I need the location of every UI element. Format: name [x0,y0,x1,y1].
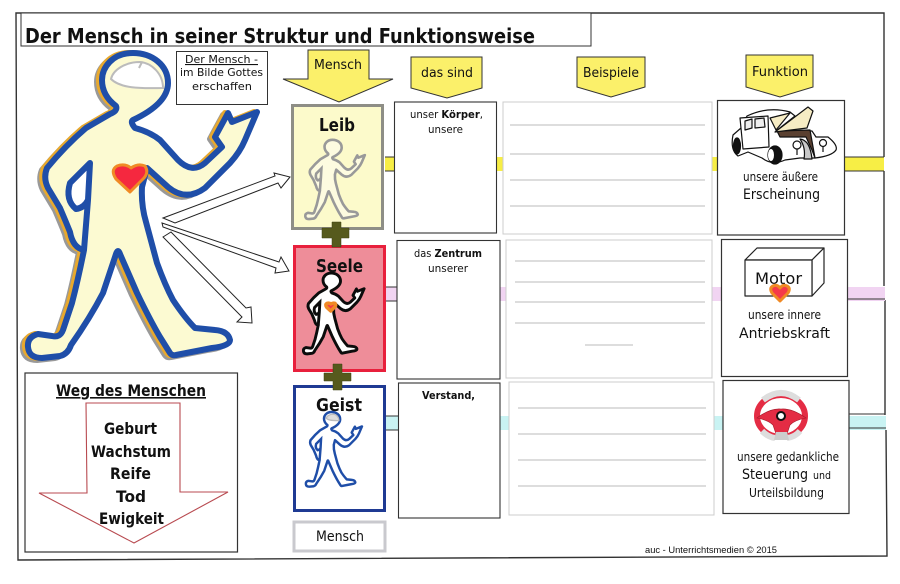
panel: Mensch label: Mensch [316,529,364,545]
panel: das sind Seele [397,240,500,379]
panel: Funktion Geist [723,380,849,514]
header arrow: das sind [411,57,482,98]
icon: plus Leib Seele [322,222,349,247]
panel: Leib: Leib [319,115,355,136]
icon: motor heart [771,285,789,301]
icon: brain in head [111,62,163,88]
panel: Funktion Leib: Erscheinung [743,187,820,203]
icon: Geist figure [306,412,362,487]
panel: Funktion Seele [722,240,848,376]
panel: Funktion Geist: Urteilsbildung [749,486,824,500]
panel: Funktion Seele: Antriebskraft [739,326,831,342]
title: Der Mensch in seiner Struktur und Funktionsweise [25,24,535,48]
panel: das sind Geist: Verstand, [422,389,475,402]
panel: Funktion Seele: unsere innere [748,308,821,322]
header arrow: Funktion [746,55,813,97]
panel: Beispiele Leib [503,102,712,234]
panel: Seele: Seele [316,256,363,277]
band: cyan Geist row [386,414,886,430]
panel: das sind Geist [398,383,500,518]
large human figure [23,53,257,360]
panel: Weg des Menschen [25,373,238,552]
arrow: to Seele [162,223,289,273]
panel: Funktion Seele: Motor [755,269,802,288]
panel: Funktion Leib: unsere äußere [743,170,818,184]
arrow: to Leib [163,173,290,223]
panel: Seele [294,246,384,370]
panel: das sind Leib [394,102,496,233]
footer credit: auc - Unterrichtsmedien © 2015 [645,545,777,555]
panel: das sind Leib: unsere [428,123,463,136]
panel: Mensch label [294,522,385,551]
header arrow: Beispiele: Beispiele [583,66,639,81]
callout: im Bilde Gottes: Der Mensch - [185,53,258,66]
icon: heart [113,165,147,192]
title [21,13,591,48]
callout: im Bilde Gottes: erschaffen [192,80,252,93]
header arrow: Mensch: Mensch [314,58,362,73]
panel: das sind Seele: das Zentrum [414,247,482,260]
panel: Funktion Leib [718,100,844,235]
panel: Weg des Menschen: Ewigkeit [99,509,164,528]
panel: Funktion Geist: Steuerung [742,467,808,483]
header arrow: Funktion: Funktion [752,65,808,80]
panel: Leib [292,106,382,228]
icon: car [732,107,836,164]
panel: das sind Leib: unser Körper, [410,108,483,121]
header arrow: Mensch [283,50,393,102]
callout: im Bilde Gottes [176,52,268,104]
panel: Weg des Menschen: Weg des Menschen [56,381,206,400]
band: pink Seele row [386,287,885,301]
header arrow: das sind: das sind [421,66,473,81]
icon: steering wheel [757,393,806,440]
icon: motor block [745,248,824,296]
band: yellow Leib row [385,157,884,171]
header arrow: Beispiele [577,57,645,97]
panel: das sind Seele: unserer [428,262,468,275]
panel: Weg des Menschen: Reife [110,464,151,483]
panel: Funktion Geist: unsere gedankliche [737,450,839,464]
panel: Beispiele Geist [509,382,714,515]
arrow: to Geist [163,232,252,323]
callout: im Bilde Gottes: im Bilde Gottes [180,66,263,79]
icon: Seele figure [303,273,364,354]
panel: Funktion Geist: und [813,469,831,482]
panel: Geist [294,386,384,510]
icon: Leib figure [305,140,365,219]
panel: Geist: Geist [316,395,362,416]
panel: Weg des Menschen: Tod [116,487,146,506]
panel: Weg des Menschen: Geburt [104,419,157,438]
icon: plus Seele Geist [324,364,351,390]
panel: Weg des Menschen: Wachstum [91,442,171,461]
panel: Beispiele Seele [506,240,712,378]
arrow: Lebensweg [39,403,228,543]
